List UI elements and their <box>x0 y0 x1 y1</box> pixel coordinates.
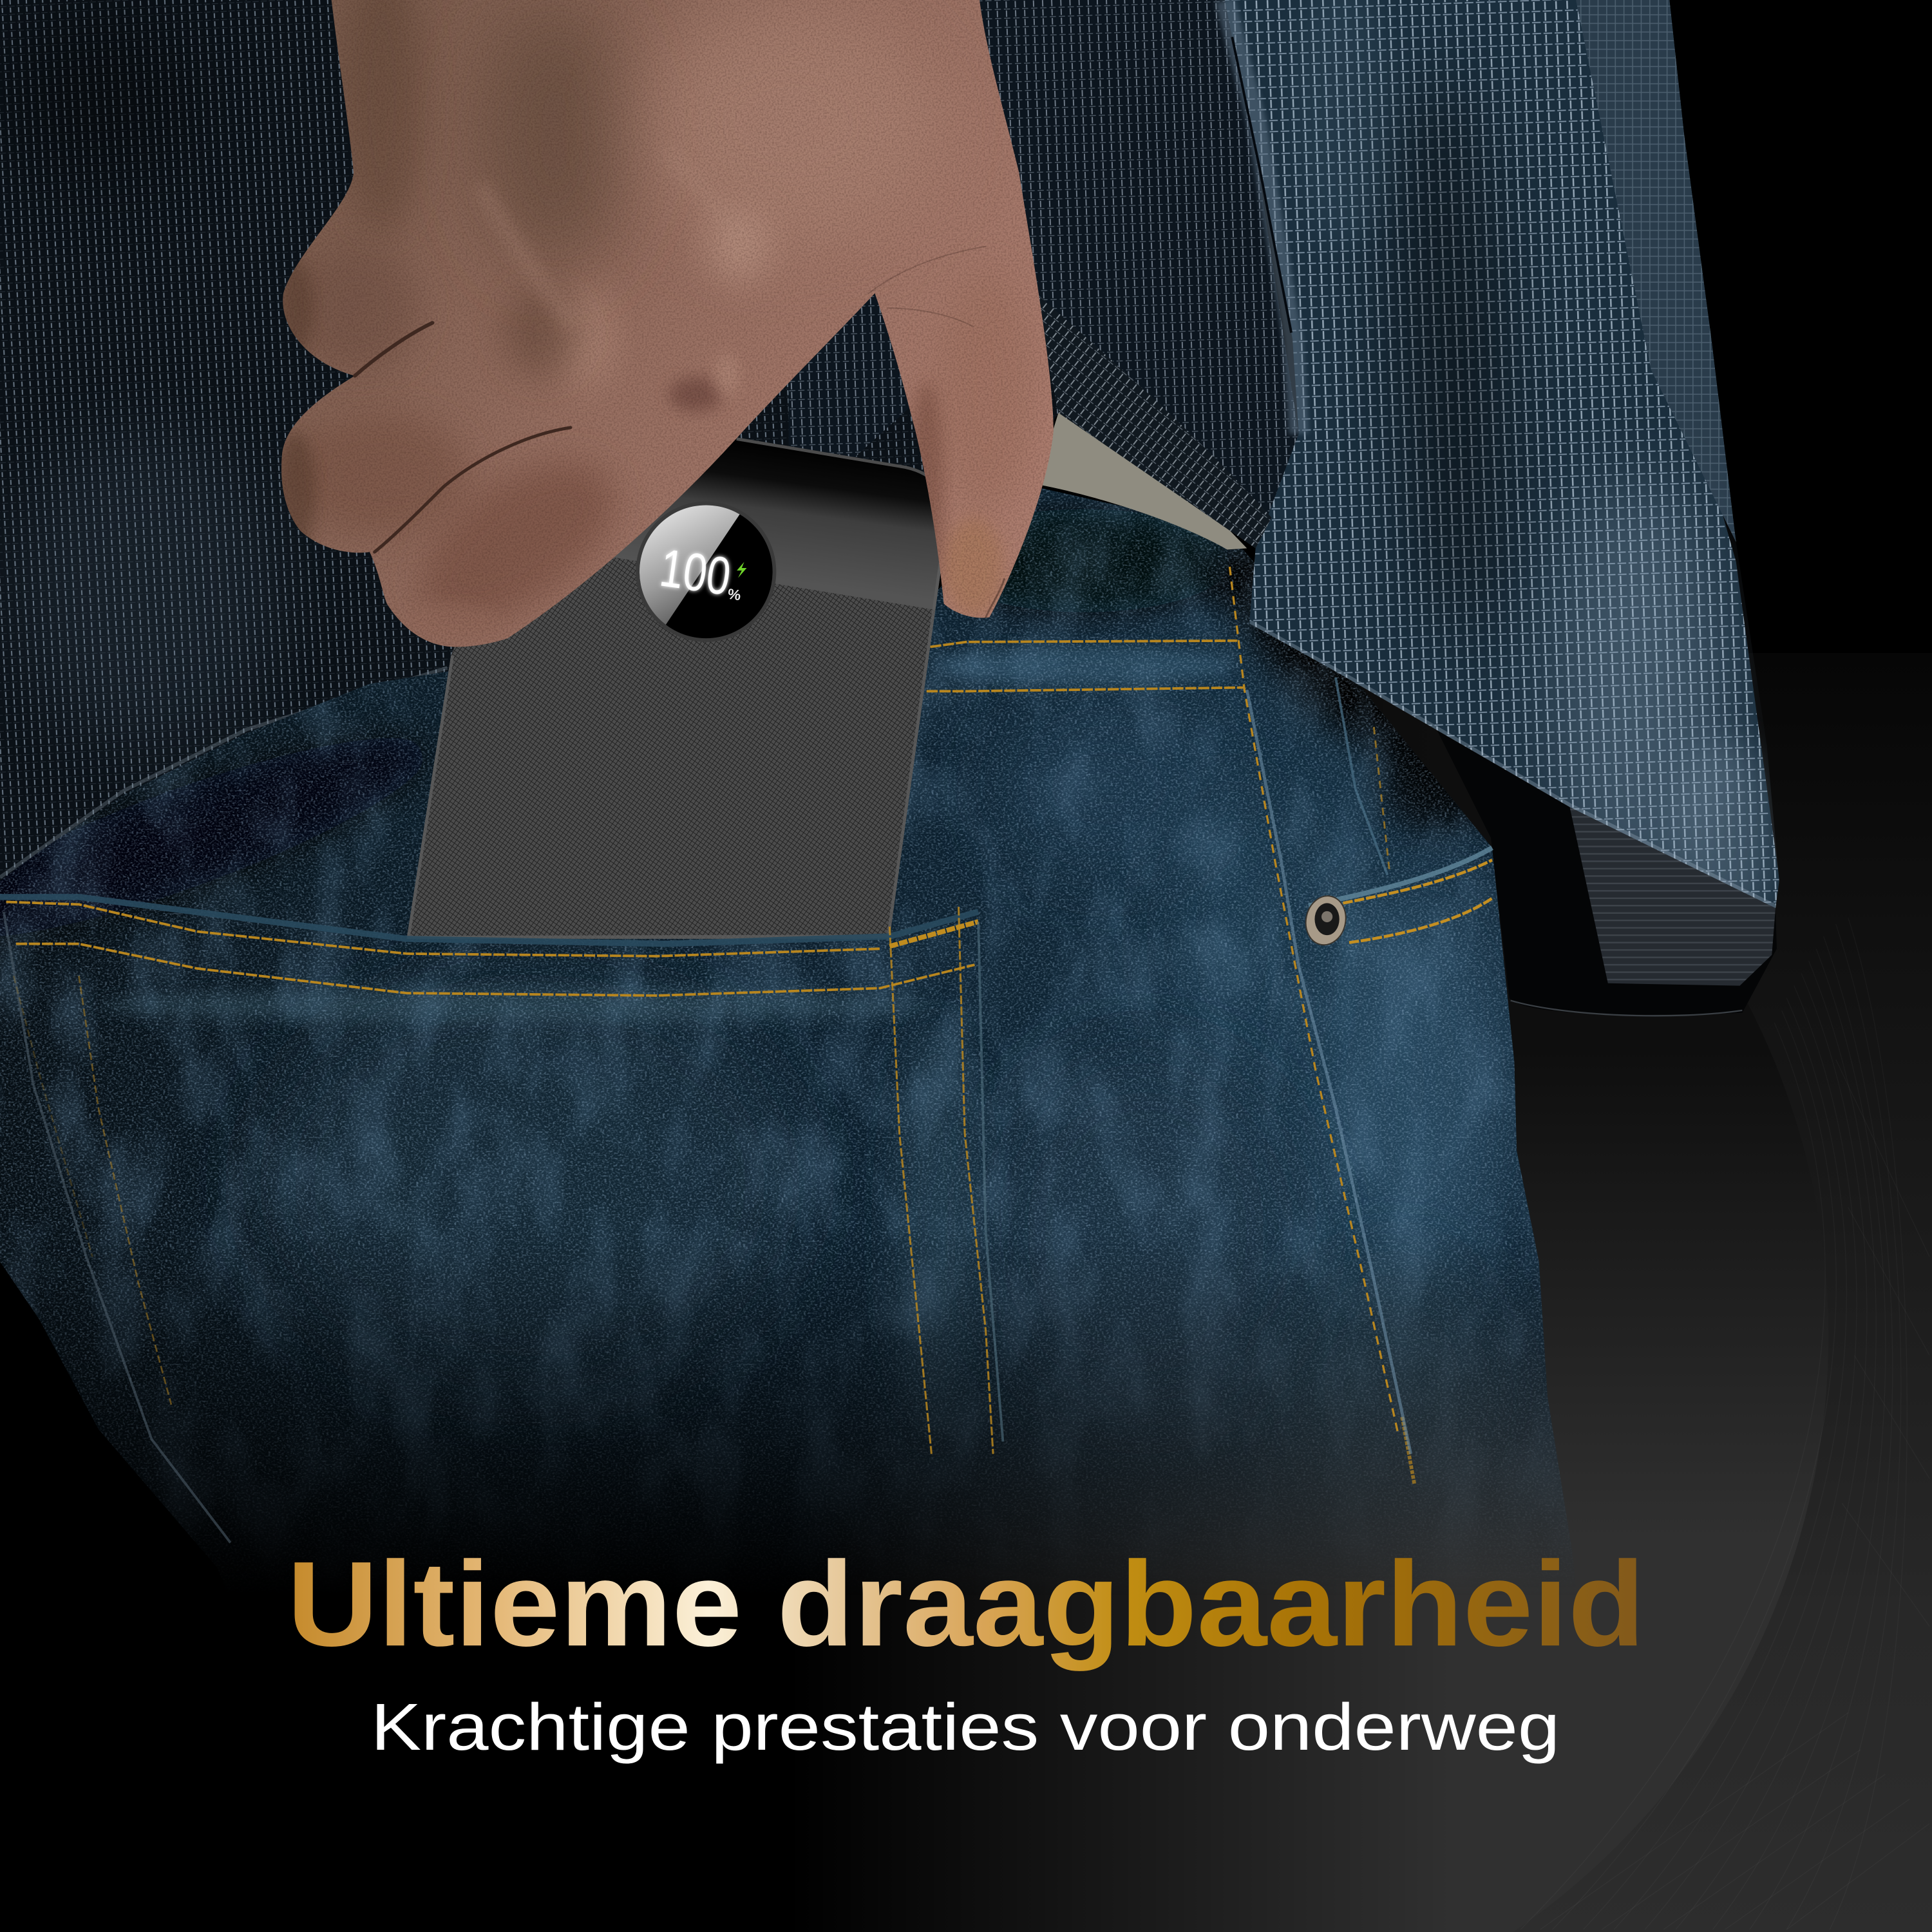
shirt back panel <box>1576 0 1736 542</box>
coin pocket and rivet <box>1302 848 1492 949</box>
right pocket edge <box>978 922 1003 1442</box>
finger creases <box>355 247 1004 618</box>
title: Ultieme draagbaarheid <box>287 1536 1645 1671</box>
reinforced pocket corner stitch <box>889 922 978 946</box>
hip seam highlight <box>1247 690 1411 1454</box>
shirt right panel <box>1225 0 1781 912</box>
icon: charging bolt <box>737 562 746 578</box>
shirt centre panel <box>788 0 1299 548</box>
display <box>634 493 776 642</box>
pocket fold edge <box>0 897 978 944</box>
battery reading: % <box>726 585 742 603</box>
subtitle: Krachtige prestaties voor onderweg <box>371 1689 1560 1764</box>
shirt back flap and shadow <box>1417 690 1777 1016</box>
jeans <box>0 488 1571 1571</box>
undershirt <box>1036 413 1247 549</box>
fold shading <box>1380 71 1523 643</box>
rivet <box>1302 892 1350 949</box>
left pocket seam <box>4 912 231 1542</box>
shirt <box>0 0 1781 936</box>
shirt hem fold <box>1034 291 1271 548</box>
pocket stitching <box>0 567 1414 1542</box>
bottom text block <box>287 1536 1645 1764</box>
coin pocket seam <box>1336 677 1387 875</box>
device top smooth band <box>493 419 973 616</box>
power bank <box>394 419 973 949</box>
device body fabric <box>394 419 961 949</box>
battery reading: 100 <box>656 538 734 607</box>
pocket stitch lines <box>6 567 1414 1484</box>
hand <box>271 0 1072 654</box>
